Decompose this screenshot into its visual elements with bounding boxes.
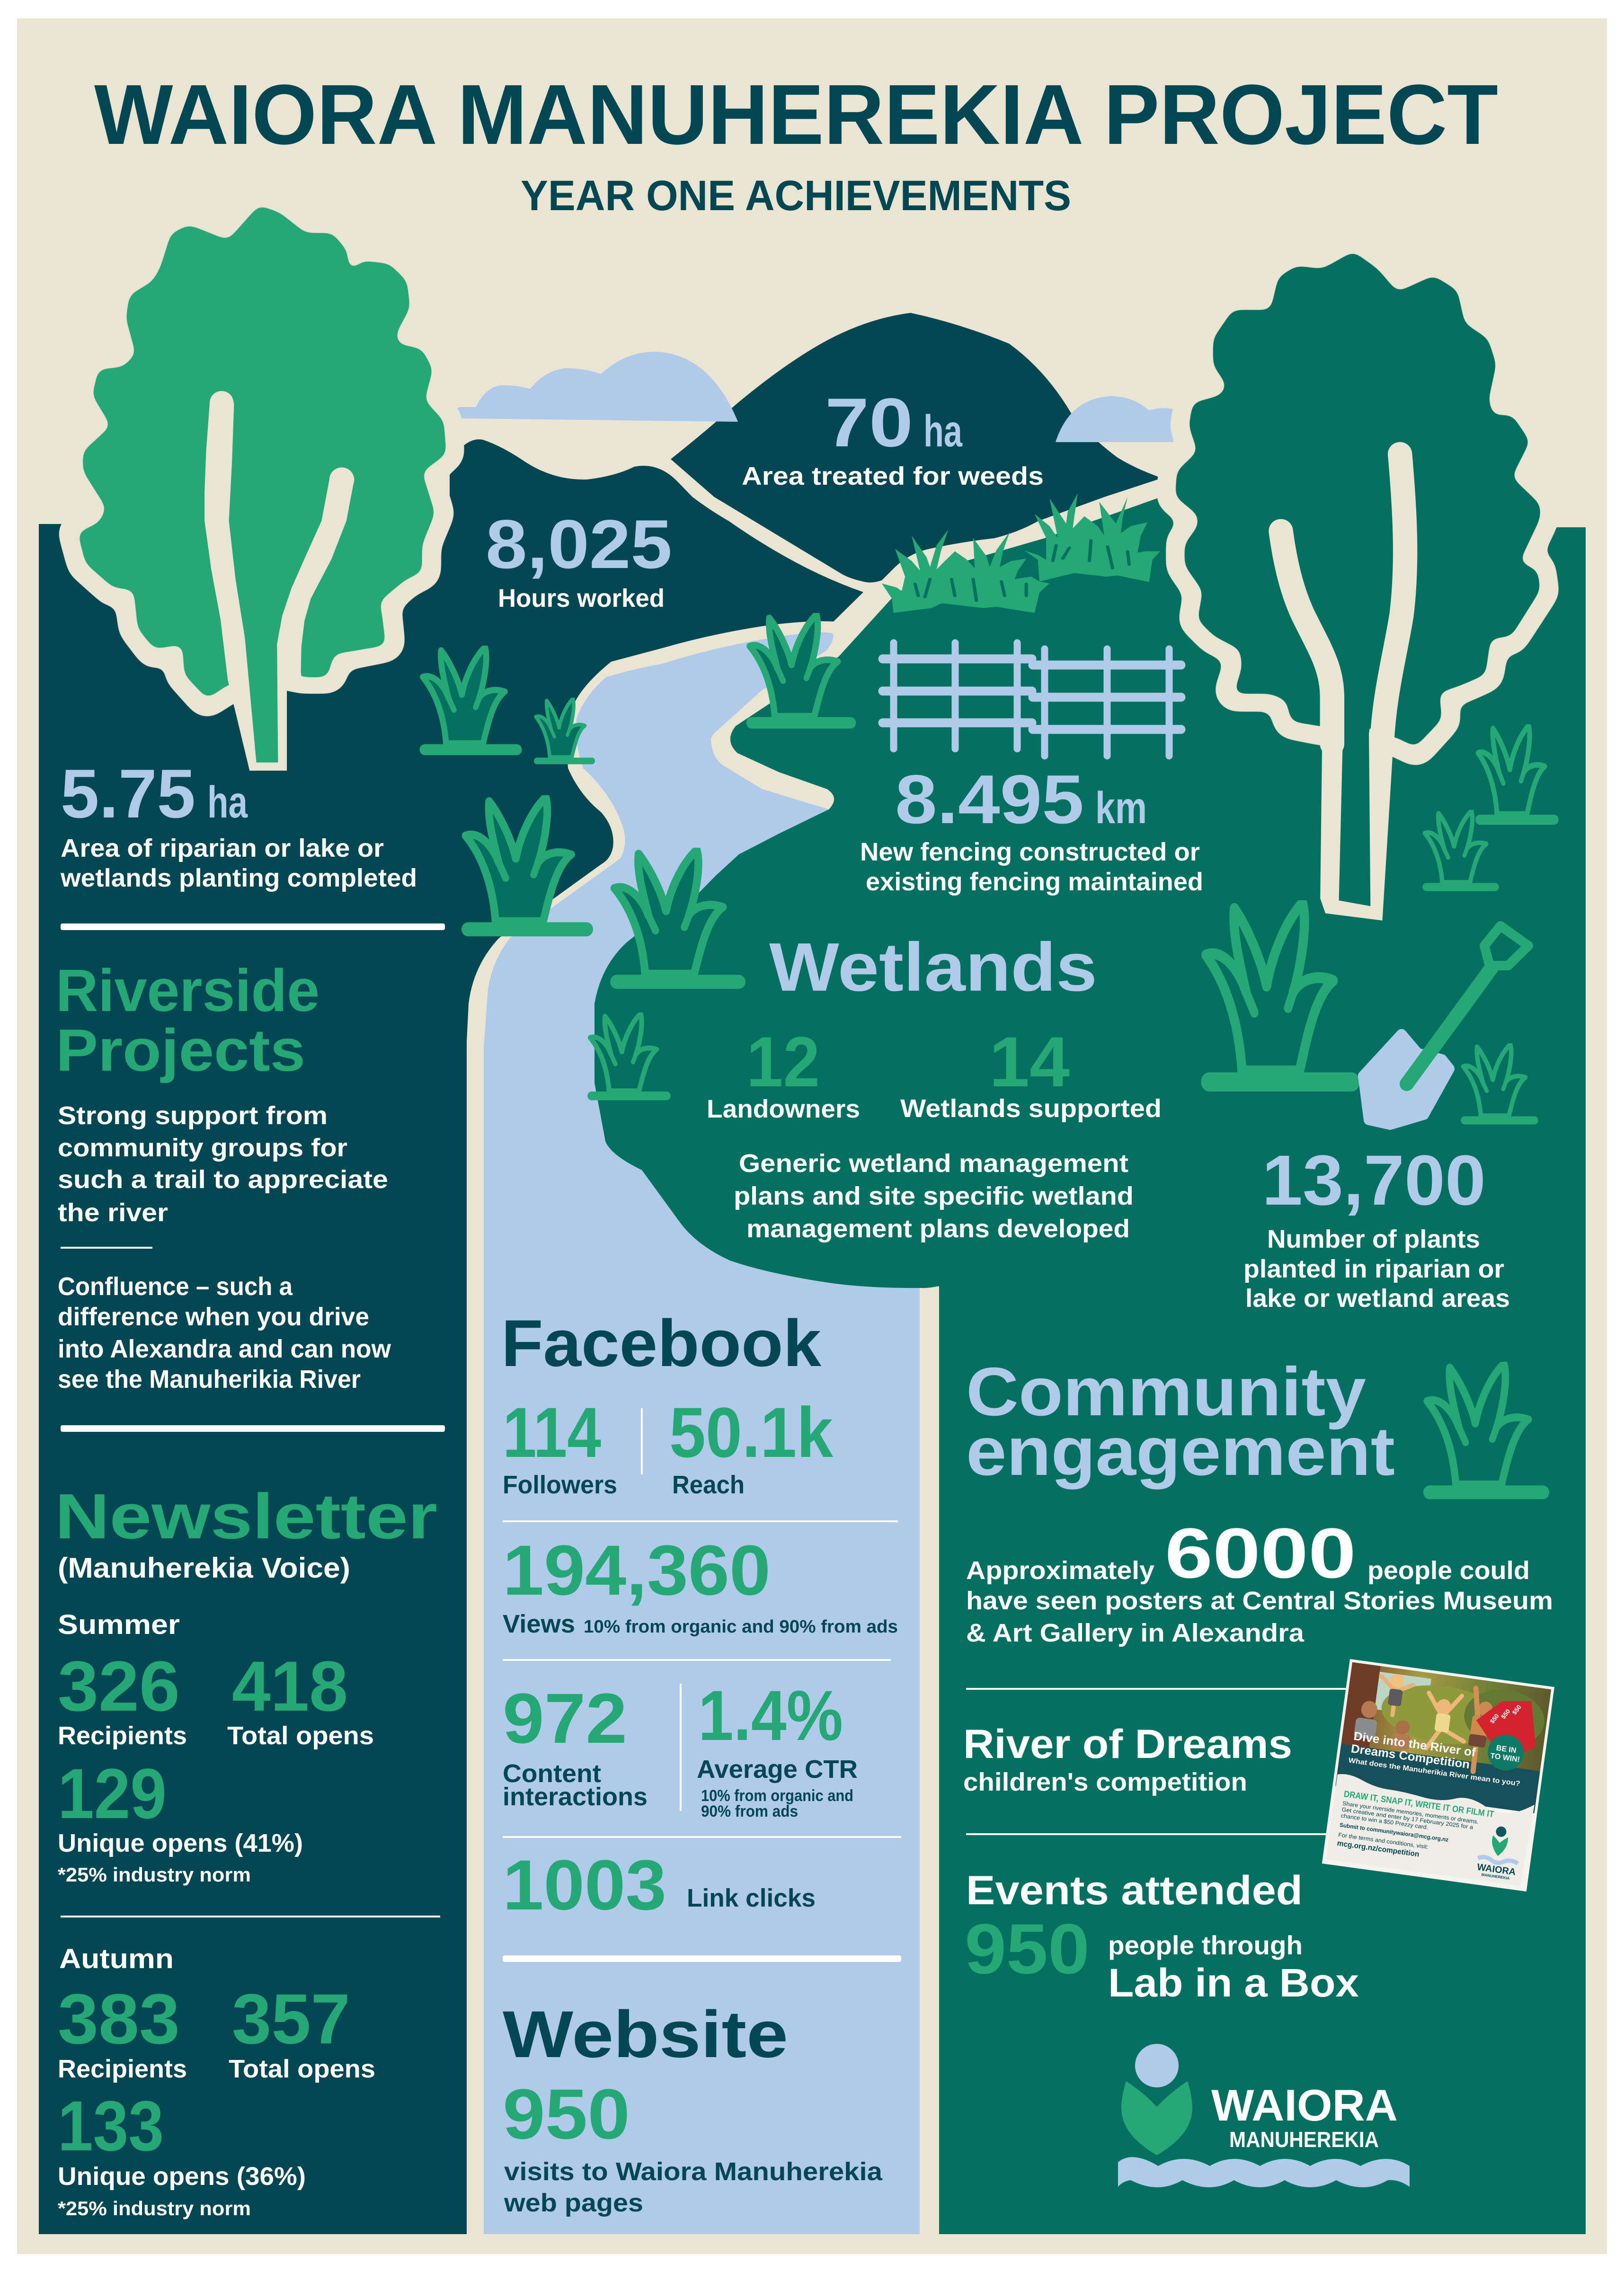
- cloud: left: [455, 352, 738, 422]
- section: Website: Website: [503, 1997, 788, 2071]
- section: Wetlands: management plans developed: [746, 1215, 1130, 1243]
- section: Facebook: [501, 1306, 901, 1925]
- competition: [963, 1722, 1292, 1796]
- newsletter: Summer: 129: [58, 1754, 167, 1833]
- section: Riverside Projects: into Alexandra and can now: [58, 1335, 391, 1363]
- section: Facebook: Followers: [503, 1471, 617, 1499]
- section: Community engagement: [963, 1353, 1553, 2005]
- icon: plant 9: [1425, 811, 1495, 887]
- section: Website: 950: [503, 2074, 630, 2154]
- stat: 13,700 plants: Number of plants: [1267, 1225, 1480, 1253]
- tree: right teal tree: [1175, 251, 1540, 921]
- panel: teal land and community engagement column: [595, 498, 1586, 2234]
- icon: plant 6: [750, 614, 851, 723]
- poster: River of Dreams competition: Get creative and enter by 17 February 2025 for a: [1341, 1806, 1473, 1831]
- stat: 13,700 plants: 13,700: [1262, 1140, 1486, 1220]
- section: Riverside Projects: Riverside: [56, 957, 319, 1024]
- section: Wetlands: plans and site specific wetland: [734, 1182, 1134, 1210]
- section: Newsletter: (Manuherekia Voice): [58, 1552, 350, 1584]
- section: Riverside Projects: Projects: [56, 1017, 305, 1083]
- stat: 70 ha: ha: [923, 406, 963, 456]
- icon: plant 11: [1427, 1364, 1543, 1492]
- section: Facebook: Average CTR: [697, 1755, 858, 1784]
- stat: 8.495 km fencing: existing fencing maintained: [866, 868, 1203, 896]
- section: Facebook: 50.1k: [669, 1393, 834, 1472]
- newsletter: Summer: Recipients: [58, 1722, 187, 1750]
- hill: 70 ha weeds: [671, 313, 1162, 583]
- poster logo: WAIORA: [1476, 1862, 1517, 1878]
- competition: River of Dreams: [963, 1722, 1292, 1767]
- panel: navy land and Riverside/Newsletter column: [39, 439, 863, 2234]
- stat: 8.495 km fencing: New fencing constructed or: [860, 838, 1200, 866]
- icon: fence: [883, 643, 1181, 756]
- section: Community engagement: engagement: [966, 1413, 1395, 1490]
- badge: TO WIN!: [1490, 1752, 1520, 1764]
- section: Wetlands: 14: [989, 1022, 1070, 1101]
- newsletter: Autumn: 357: [232, 1979, 350, 2059]
- section: Facebook: 90% from ads: [701, 1802, 798, 1820]
- newsletter: Autumn: 133: [58, 2086, 164, 2166]
- section: Community engagement: people could: [1367, 1556, 1530, 1585]
- section: Riverside Projects: see the Manuherikia River: [58, 1365, 361, 1393]
- section: Community engagement: & Art Gallery in Alexandra: [966, 1619, 1305, 1647]
- newsletter: Autumn: *25% industry norm: [58, 2197, 251, 2219]
- section: Riverside Projects: the river: [58, 1198, 168, 1227]
- stat: 70 ha: Area treated for weeds: [742, 462, 1044, 490]
- section: Community engagement: 6000: [1165, 1513, 1356, 1593]
- icon: plant 5: [590, 1014, 666, 1096]
- newsletter: Autumn: Autumn: [59, 1944, 174, 1974]
- stat: 13,700 plants: lake or wetland areas: [1245, 1284, 1510, 1313]
- icon: plant 8: [1463, 1044, 1535, 1120]
- section: Wetlands: Generic wetland management: [739, 1149, 1128, 1178]
- icon: plant 2: [536, 699, 592, 761]
- subtitle: YEAR ONE ACHIEVEMENTS: [521, 172, 1071, 220]
- grass tufts on hillside: [882, 493, 1160, 613]
- logo: Waiora Manuherekia: MANUHEREKIA: [1229, 2127, 1379, 2152]
- stat: 5.75 ha: Area of riparian or lake or: [61, 834, 384, 862]
- newsletter: Autumn: [58, 1944, 375, 2219]
- poster: River of Dreams competition: Dive into the River of: [1353, 1730, 1477, 1759]
- section: Riverside Projects: Confluence – such a: [58, 1272, 293, 1301]
- stat: 8.495 km fencing: [860, 761, 1203, 896]
- section: Facebook: Content: [503, 1759, 601, 1788]
- newsletter: Summer: Total opens: [227, 1722, 374, 1750]
- panel: river and social media column: [484, 632, 920, 2234]
- icon: plant 4: [614, 850, 738, 982]
- poster: River of Dreams competition: Submit to communitywaiora@mcg.org.nz: [1339, 1821, 1449, 1843]
- poster: River of Dreams competition: chance to win a $50 Prezzy card.: [1340, 1812, 1429, 1831]
- prize cards: [1473, 1694, 1542, 1756]
- tree: left green tree: [78, 205, 446, 771]
- stat: 8.495 km fencing: km: [1095, 783, 1147, 833]
- section: Facebook: 972: [503, 1678, 627, 1758]
- badge: [1485, 1732, 1526, 1773]
- newsletter: Summer: 326: [58, 1646, 180, 1726]
- logo: Waiora Manuherekia: [1118, 2044, 1410, 2187]
- badge: BE IN: [1496, 1744, 1517, 1755]
- section: Facebook: Reach: [672, 1471, 745, 1499]
- section: Riverside Projects: such a trail to appreciate: [58, 1165, 388, 1194]
- section: Wetlands: 12: [746, 1022, 820, 1101]
- poster: River of Dreams competition: For the terms and conditions, visit:: [1338, 1831, 1429, 1850]
- section: Facebook: 10% from organic and: [701, 1787, 853, 1805]
- newsletter: Summer: [58, 1609, 374, 1886]
- prize cards: $50: [1500, 1708, 1511, 1720]
- poster: River of Dreams competition: [1322, 1659, 1554, 1891]
- stat: 5.75 ha: 5.75: [61, 755, 195, 832]
- section: Facebook: 10% from organic and 90% from ads: [584, 1617, 898, 1637]
- prize cards: $50: [1489, 1713, 1500, 1725]
- icon: plant 1: [423, 647, 516, 750]
- events attended: people through: [1108, 1930, 1303, 1960]
- stat: 8.495 km fencing: 8.495: [895, 761, 1084, 838]
- section: Community engagement: have seen posters at Central Stories Museum: [966, 1587, 1553, 1615]
- section: Wetlands: Wetlands: [769, 929, 1097, 1005]
- icon: plant 10: [1478, 726, 1554, 820]
- icon: shovel: [1363, 926, 1528, 1125]
- section: Newsletter: Newsletter: [55, 1481, 437, 1552]
- stat: 8,025 hours: [486, 506, 672, 612]
- stat: 13,700 plants: planted in riparian or: [1243, 1255, 1504, 1283]
- section: Community engagement: Approximately: [966, 1556, 1154, 1585]
- title: WAIORA MANUHEREKIA PROJECT: [94, 67, 1498, 162]
- poster: River of Dreams competition: Dreams Competition: [1350, 1742, 1471, 1771]
- stat: 70 ha: 70: [825, 384, 913, 461]
- section: Riverside Projects: community groups for: [58, 1134, 347, 1162]
- section: Wetlands: Wetlands supported: [900, 1094, 1162, 1123]
- section: Wetlands: Landowners: [707, 1095, 860, 1123]
- competition: children's competition: [963, 1768, 1247, 1796]
- section: Facebook: Link clicks: [687, 1884, 816, 1912]
- poster logo: [1475, 1824, 1523, 1882]
- events attended: [965, 1868, 1359, 2005]
- stat: 8,025 hours: Hours worked: [498, 584, 665, 612]
- stat: 13,700 plants: [1243, 1140, 1510, 1313]
- section: Website: web pages: [504, 2189, 643, 2217]
- section: Riverside Projects: Strong support from: [58, 1101, 328, 1130]
- stat: 5.75 ha: ha: [207, 777, 248, 827]
- events attended: Lab in a Box: [1108, 1961, 1359, 2005]
- section: Wetlands: [707, 929, 1162, 1243]
- events attended: Events attended: [966, 1868, 1303, 1913]
- section: Community engagement: Community: [966, 1353, 1366, 1430]
- section: Facebook: Facebook: [501, 1306, 821, 1380]
- section: Riverside Projects: [56, 957, 391, 1393]
- section: Newsletter: [55, 1481, 440, 2219]
- section: Website: [503, 1997, 883, 2217]
- poster: River of Dreams competition: DRAW IT, SNAP IT, WRITE IT OR FILM IT: [1343, 1789, 1495, 1819]
- newsletter: Summer: Summer: [58, 1609, 180, 1640]
- section: Facebook: 114: [503, 1393, 601, 1472]
- logo: Waiora Manuherekia: WAIORA: [1211, 2080, 1398, 2130]
- newsletter: Summer: 418: [232, 1646, 348, 1726]
- section: Facebook: 1.4%: [698, 1676, 843, 1755]
- icon: plant 3: [466, 797, 586, 929]
- newsletter: Autumn: 383: [58, 1979, 180, 2059]
- stat: 8,025 hours: 8,025: [486, 506, 672, 583]
- events attended: 950: [965, 1909, 1090, 1988]
- section: Riverside Projects: difference when you drive: [58, 1303, 369, 1331]
- stat: 5.75 ha: [60, 755, 417, 892]
- section: Facebook: 194,360: [503, 1530, 771, 1610]
- poster: River of Dreams competition: mcg.org.nz/competition: [1337, 1839, 1420, 1859]
- poster: River of Dreams competition: What does the Manuherikia River mean to you?: [1348, 1757, 1521, 1788]
- icon: plant 7: [1206, 903, 1352, 1082]
- section: Facebook: Views: [503, 1610, 575, 1638]
- section: Facebook: 1003: [503, 1845, 666, 1925]
- newsletter: Autumn: Unique opens (36%): [58, 2162, 306, 2191]
- stat: 5.75 ha: wetlands planting completed: [60, 864, 417, 892]
- section: Website: visits to Waiora Manuherekia: [504, 2157, 883, 2186]
- section: Facebook: interactions: [503, 1783, 648, 1811]
- poster logo: MANUHEREKIA: [1481, 1873, 1510, 1881]
- stat: 70 ha: [742, 384, 1044, 490]
- kids illustration: [1351, 1669, 1496, 1773]
- newsletter: Summer: *25% industry norm: [58, 1864, 251, 1886]
- cloud: right: [1056, 396, 1207, 442]
- newsletter: Autumn: Total opens: [229, 2055, 375, 2083]
- newsletter: Summer: Unique opens (41%): [58, 1829, 303, 1857]
- newsletter: Autumn: Recipients: [58, 2055, 187, 2083]
- prize cards: $50: [1511, 1704, 1523, 1716]
- poster: River of Dreams competition: Share your riverside memories, moments or dreams.: [1342, 1800, 1479, 1825]
